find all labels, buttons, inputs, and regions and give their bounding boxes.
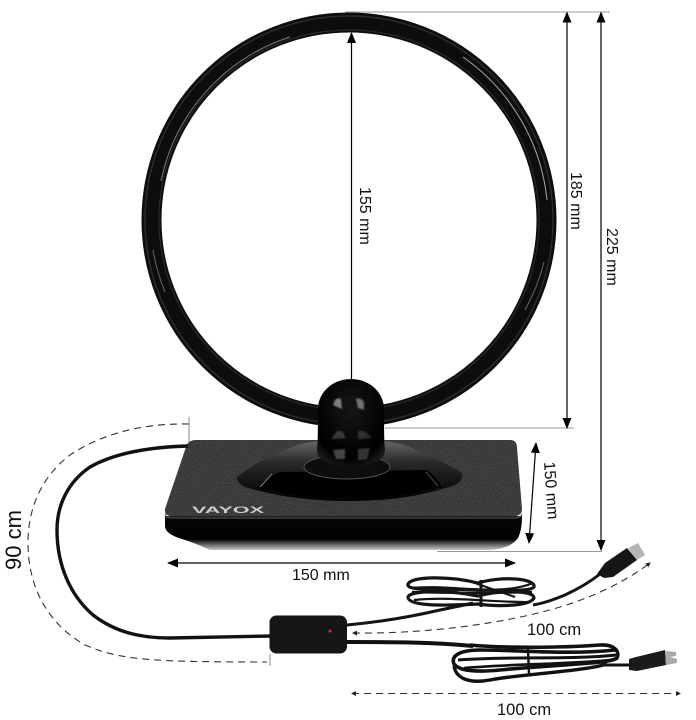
USB cable with coil <box>347 574 600 625</box>
brand logo: VAYOX <box>192 505 264 515</box>
loop ring antenna <box>145 16 553 424</box>
dimension: 155 mm loop inner height: 155 mm <box>356 187 373 245</box>
dimension: 90 cm antenna cable: 90 cm <box>1 510 26 570</box>
dimension: 100 cm USB cable <box>353 563 650 639</box>
signal amplifier box <box>270 616 347 654</box>
domed pedestal <box>237 441 462 501</box>
dimension: 150 mm base depth <box>529 443 561 543</box>
USB plug <box>597 543 645 578</box>
dimension: 100 cm coaxial cable: 100 cm <box>497 701 551 719</box>
coaxial cable with coil <box>347 642 630 681</box>
dimension: 185 mm loop height: 185 mm <box>567 172 584 230</box>
dimension: 100 cm USB cable: 100 cm <box>527 621 581 639</box>
dimension: 150 mm base width: 150 mm <box>292 567 350 584</box>
antenna cable, 90 cm <box>57 446 272 638</box>
coaxial plug <box>629 650 677 671</box>
square base <box>165 440 522 550</box>
swivel ball joint <box>317 379 385 466</box>
dimension: 90 cm antenna cable <box>1 417 270 666</box>
antenna product photo <box>145 16 553 550</box>
dimension: 225 mm total height: 225 mm <box>603 228 620 286</box>
dimension: 150 mm base depth: 150 mm <box>540 461 561 520</box>
